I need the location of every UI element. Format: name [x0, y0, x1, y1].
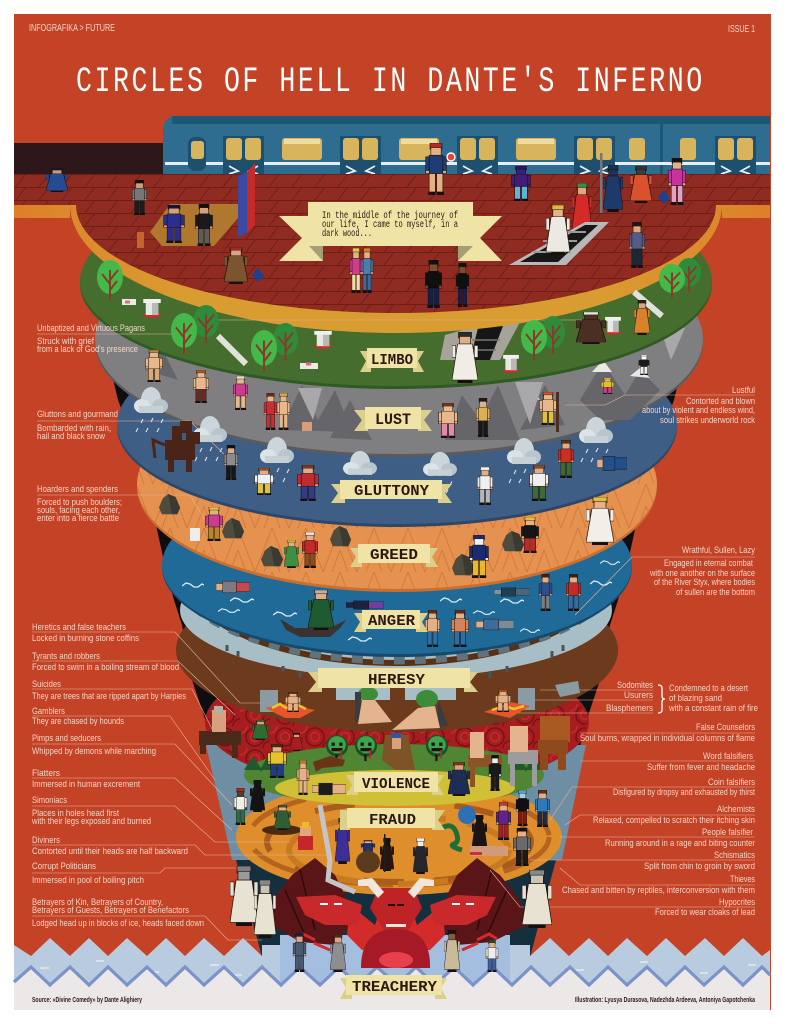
label: lustful: soul strikes underworld rock — [660, 415, 755, 426]
limbo: escalator — [440, 322, 520, 360]
lust: figures — [145, 350, 649, 438]
label: suicides: They are trees that are ripped apart by Harpies — [32, 691, 186, 702]
banner: Fraud — [340, 808, 445, 830]
violence: harpy — [382, 733, 415, 770]
label: gamblers: They are chased by hounds — [32, 716, 124, 727]
label: wrathful — [649, 545, 755, 598]
label: simoniacs: Simoniacs — [32, 795, 67, 806]
metro tunnel — [14, 143, 166, 175]
platform: man in black — [425, 260, 442, 308]
label: suicides: Suicides — [32, 679, 61, 690]
icon: columned pillar on platform — [238, 163, 255, 237]
label: false counselors — [580, 722, 755, 744]
anger: waves — [182, 561, 620, 641]
header: issue number: ISSUE 1 — [728, 24, 755, 35]
label: pimps: Pimps and seducers — [32, 733, 101, 744]
anger: fighting men — [425, 610, 469, 647]
label: suicides — [32, 679, 186, 702]
heresy: Medusa right — [392, 690, 448, 730]
anger: floating bodies — [216, 581, 530, 630]
label: wrathful: with one another on the surface — [649, 568, 755, 579]
violence: hound — [313, 756, 345, 772]
treachery: dark pit — [236, 860, 556, 957]
fraud: burning feet — [298, 822, 313, 850]
platform: metro attendant — [426, 143, 446, 195]
label: sodomites, usurers, blasphemers: of blazing sand — [669, 693, 722, 704]
anger: blue river disc — [162, 476, 632, 657]
label: hypocrites: Hypocrites — [719, 897, 755, 908]
label: alchemists — [593, 804, 755, 826]
metro train — [163, 116, 770, 174]
label: sodomites, usurers, blasphemers: Sodomites — [617, 680, 653, 691]
label: pagans: Struck with grief — [37, 336, 94, 347]
label: word falsifiers: Suffer from fever and headache — [647, 762, 755, 773]
limbo: ruined columns — [122, 292, 662, 373]
banner: Gluttony: GLUTTONY — [354, 483, 429, 500]
platform: man in blue shirt — [629, 222, 645, 268]
fraud: blue orb — [458, 806, 476, 824]
label: flatters: Immersed in human excrement — [32, 779, 140, 790]
label: hoarders: souls, facing each other, — [37, 505, 120, 516]
label: schismatics — [644, 850, 755, 872]
fraud: flatterer and demon — [234, 780, 265, 825]
label: diviners: Diviners — [32, 835, 60, 846]
label: coin falsifiers — [613, 777, 755, 798]
speech banner: In the middle of the journey of — [322, 210, 458, 222]
label: hypocrites: Forced to wear cloaks of lead — [655, 907, 755, 918]
label: diviners: Contorted until their heads are half backward — [32, 846, 188, 857]
source credit: Source: «Divine Comedy» by Dante Alighiery — [32, 995, 143, 1004]
fraud: giant scythe — [320, 805, 355, 892]
label: gamblers: Gamblers — [32, 706, 65, 717]
lust: mountains — [145, 345, 660, 440]
violence: centaur right pair — [468, 726, 538, 787]
banner: Treachery — [340, 975, 447, 999]
label: hoarders: enter into a fierce battle — [37, 513, 119, 524]
label: simoniacs — [31, 795, 151, 827]
platform: blue bag — [252, 268, 264, 282]
label: schismatics: Schismatics — [714, 850, 755, 861]
footer strip with blue zigzag — [14, 967, 770, 1010]
platform: Beatrice in red — [572, 183, 592, 233]
greed: sinners — [190, 497, 614, 578]
platform: figure in orange coat — [630, 166, 652, 203]
label: heretics: Locked in burning stone coffins — [32, 633, 139, 644]
label: flatters: Flatters — [32, 768, 60, 779]
platform: hunched figure — [46, 168, 68, 192]
label: hoarders: Forced to push boulders; — [37, 497, 122, 508]
limbo: bearded god in white — [452, 332, 478, 383]
speech banner: dark wood... — [322, 228, 372, 240]
gluttony: sinners — [224, 440, 627, 505]
fraud: blue-masked figure — [516, 790, 529, 826]
fraud: serpent — [442, 826, 462, 850]
lust: grey disc — [95, 224, 703, 457]
fraud: cauldron sinner — [356, 840, 380, 873]
treachery: ice field with zigzag edge — [14, 935, 770, 985]
treachery: three-headed Lucifer — [268, 858, 530, 950]
label: word falsifiers: Word falsifiers — [703, 751, 753, 762]
banner: Anger — [354, 610, 428, 632]
label: lustful: Contorted and blown — [686, 396, 755, 407]
label: thieves — [562, 874, 755, 896]
label: pagans — [37, 323, 145, 355]
label: betrayers: Betrayers of Kin, Betrayers of Country, — [32, 897, 163, 908]
funnel: grey-blue lower wall — [206, 745, 586, 860]
label: simoniacs: with their legs exposed and burned — [31, 816, 151, 827]
banner: Limbo — [360, 348, 424, 372]
label: betrayers: Lodged head up in blocks of ice, heads faced down — [32, 918, 204, 929]
platform: bottle — [137, 232, 144, 248]
label: lustful — [642, 385, 755, 426]
banner: Treachery: TREACHERY — [352, 979, 437, 996]
speech banner: our life, I came to myself, in a — [322, 219, 458, 231]
platform: embracing couple — [350, 248, 373, 293]
banner: Heresy: HERESY — [368, 672, 425, 689]
limbo: trees — [97, 258, 701, 372]
banner: Limbo: LIMBO — [371, 352, 413, 369]
speech banner — [279, 202, 502, 261]
label: people falsifier: Running around in a rage and biting counter — [605, 838, 755, 849]
platform: attendant sign — [447, 153, 455, 161]
fraud: hypocrites in lead cloaks, left — [230, 866, 276, 938]
heresy: fortress wall — [172, 467, 620, 700]
violence: man in tree — [252, 720, 269, 740]
label: people falsifier: People falsifier — [702, 827, 753, 838]
label: flatters — [32, 768, 140, 790]
fraud: hypocrite in black — [413, 838, 428, 874]
fraud: man in top hat — [513, 828, 531, 866]
platform floor — [14, 174, 770, 313]
platform: person sitting on bench, blue — [164, 205, 184, 243]
label: gluttons: hail and black snow — [37, 431, 105, 442]
label: alchemists: Relaxed, compelled to scratch their itching skin — [593, 815, 755, 826]
banner: Anger: ANGER — [368, 613, 415, 630]
fraud: devil with pitchfork — [380, 834, 394, 872]
violence: yellow rim — [275, 770, 515, 806]
violence: gambler chased — [268, 744, 286, 778]
violence: minotaur — [538, 716, 570, 770]
heresy: Medusa left — [355, 687, 392, 724]
platform: hooded figure with spear — [600, 153, 623, 213]
limbo: seated Buddha — [576, 312, 606, 344]
label: tyrants: Forced to swim in a boiling stream of blood — [32, 662, 179, 673]
banner: Lust: LUST — [375, 411, 411, 429]
treachery: four traitors in ice — [293, 930, 498, 972]
label: heretics — [32, 622, 139, 644]
label: wrathful: of sullen are the bottom — [676, 587, 755, 598]
label: tyrants — [32, 651, 179, 673]
violence: green ring — [244, 744, 544, 806]
label: tyrants: Tyrants and robbers — [32, 651, 100, 662]
label: sodomites, usurers, blasphemers — [606, 680, 758, 714]
label: sodomites, usurers, blasphemers: with a constant rain of fire — [668, 703, 758, 714]
heresy: burning coffins — [260, 681, 580, 718]
platform: girl in pink — [668, 158, 686, 205]
limbo: green disc — [80, 176, 712, 389]
heresy: brown disc — [176, 568, 618, 732]
banner: Gluttony — [331, 480, 452, 503]
platform: person sitting on bench, black — [195, 204, 213, 246]
label: hoarders — [37, 484, 122, 524]
fraud: purple-robed alchemist — [496, 802, 511, 840]
anger: boat — [280, 619, 346, 637]
greed: boulders — [159, 494, 524, 575]
label: wrathful: Engaged in eternal combat — [664, 558, 753, 569]
fraud: simoniac in hole — [262, 805, 302, 835]
violence: vampire — [489, 755, 501, 791]
label: pagans: Unbaptized and Virtuous Pagans — [37, 323, 145, 334]
platform: walking figure — [132, 180, 147, 215]
label: diviners — [32, 835, 188, 857]
violence: figure in dark coat — [448, 762, 470, 796]
banner: Violence: VIOLENCE — [362, 776, 430, 793]
funnel: dark pit walls — [105, 300, 687, 957]
label: pimps: Whipped by demons while marching — [32, 746, 156, 757]
label: coin falsifiers: Coin falsifiers — [708, 777, 755, 788]
platform: descending escalator — [509, 222, 609, 265]
gluttony: three-headed Cerberus — [153, 421, 200, 472]
label: gluttons — [37, 409, 118, 442]
label: sodomites, usurers, blasphemers: Blasphemers — [606, 703, 653, 714]
bench — [150, 204, 238, 246]
platform floor bricks — [14, 174, 770, 313]
label: betrayers: Betrayers of Guests, Betrayers of Benefactors — [32, 905, 189, 916]
label: false counselors: Soul burns, wrapped in individual columns of flame — [580, 733, 755, 744]
gluttony: blue disc — [117, 324, 677, 527]
label: corrupt politicians: Immersed in pool of boiling pitch — [32, 875, 144, 886]
banner: Greed — [350, 544, 438, 567]
anger: Charon — [308, 590, 334, 630]
platform: person in hooded coat — [224, 247, 248, 284]
label: sodomites, usurers, blasphemers: Condemned to a desert — [669, 683, 748, 694]
label: heretics: Heretics and false teachers — [32, 622, 126, 633]
label: word falsifiers — [647, 751, 755, 773]
violence: dark trees row — [245, 756, 542, 770]
fraud: schismatic on table — [470, 846, 508, 856]
label: alchemists: Alchemists — [717, 804, 755, 815]
anger: two bystanders — [539, 574, 581, 611]
platform: runner — [512, 166, 530, 201]
fraud: man in blue jacket — [535, 790, 550, 827]
violence: suicide trees — [326, 735, 448, 761]
label: hoarders: Hoarders and spenders — [37, 484, 118, 495]
label: people falsifier — [605, 827, 755, 849]
label: hypocrites — [655, 897, 755, 918]
limbo: monk in orange — [634, 300, 650, 335]
banner: Fraud: FRAUD — [369, 812, 416, 829]
label: simoniacs: Places in holes head first — [32, 808, 119, 819]
lust: tornadoes — [298, 328, 685, 424]
platform: second man in black — [456, 263, 469, 307]
label: pimps — [32, 733, 156, 757]
banner: Greed: GREED — [370, 547, 418, 564]
label: gluttons: Bombarded with rain, — [37, 423, 111, 434]
fraud: black devil — [472, 815, 487, 848]
label: gamblers — [32, 706, 124, 727]
label: schismatics: Split from chin to groin by sword — [644, 861, 755, 872]
fraud: disc — [236, 779, 562, 895]
greed: orange disc — [137, 379, 657, 592]
platform: blue bag — [658, 190, 670, 204]
label: lustful: Lustful — [732, 385, 755, 396]
label: pagans: from a lack of God's presence — [37, 344, 138, 355]
header: section label: INFOGRAFIKA > FUTURE — [29, 23, 115, 34]
leader lines — [32, 320, 755, 940]
title: CIRCLES OF HELL IN DANTE'S INFERNO — [76, 63, 702, 102]
label: corrupt politicians — [32, 861, 144, 886]
label: lustful: about by violent and endless wind, — [642, 405, 755, 416]
label: betrayers — [32, 897, 204, 929]
banner: Lust — [354, 407, 432, 431]
label: gluttons: Gluttons and gourmand — [37, 409, 118, 420]
limbo: gold rim — [14, 205, 770, 333]
banner: Heresy — [308, 668, 478, 692]
label: false counselors: False Counselors — [696, 722, 755, 733]
label: sodomites, usurers, blasphemers: Usurers — [624, 690, 653, 701]
violence: swirl texture — [207, 656, 587, 788]
banner: Violence — [346, 772, 444, 795]
label: corrupt politicians: Corrupt Politicians — [32, 861, 96, 872]
fraud: hypocrite in lead cloak, right — [522, 870, 552, 928]
label: wrathful: Wrathful, Sullen, Lazy — [682, 545, 755, 556]
violence: pimp and seducer — [297, 760, 346, 795]
violence: small head — [290, 733, 303, 751]
violence: red forest disc — [205, 654, 589, 790]
label: wrathful: of the River Styx, where bodies — [654, 577, 755, 588]
gluttony: storm clouds with rain — [134, 387, 613, 493]
violence: centaur — [199, 706, 241, 758]
treachery: red dome — [361, 929, 430, 968]
platform: Dante in white — [546, 205, 570, 255]
label: thieves: Thieves — [730, 874, 755, 885]
fraud: wizard — [335, 818, 350, 864]
